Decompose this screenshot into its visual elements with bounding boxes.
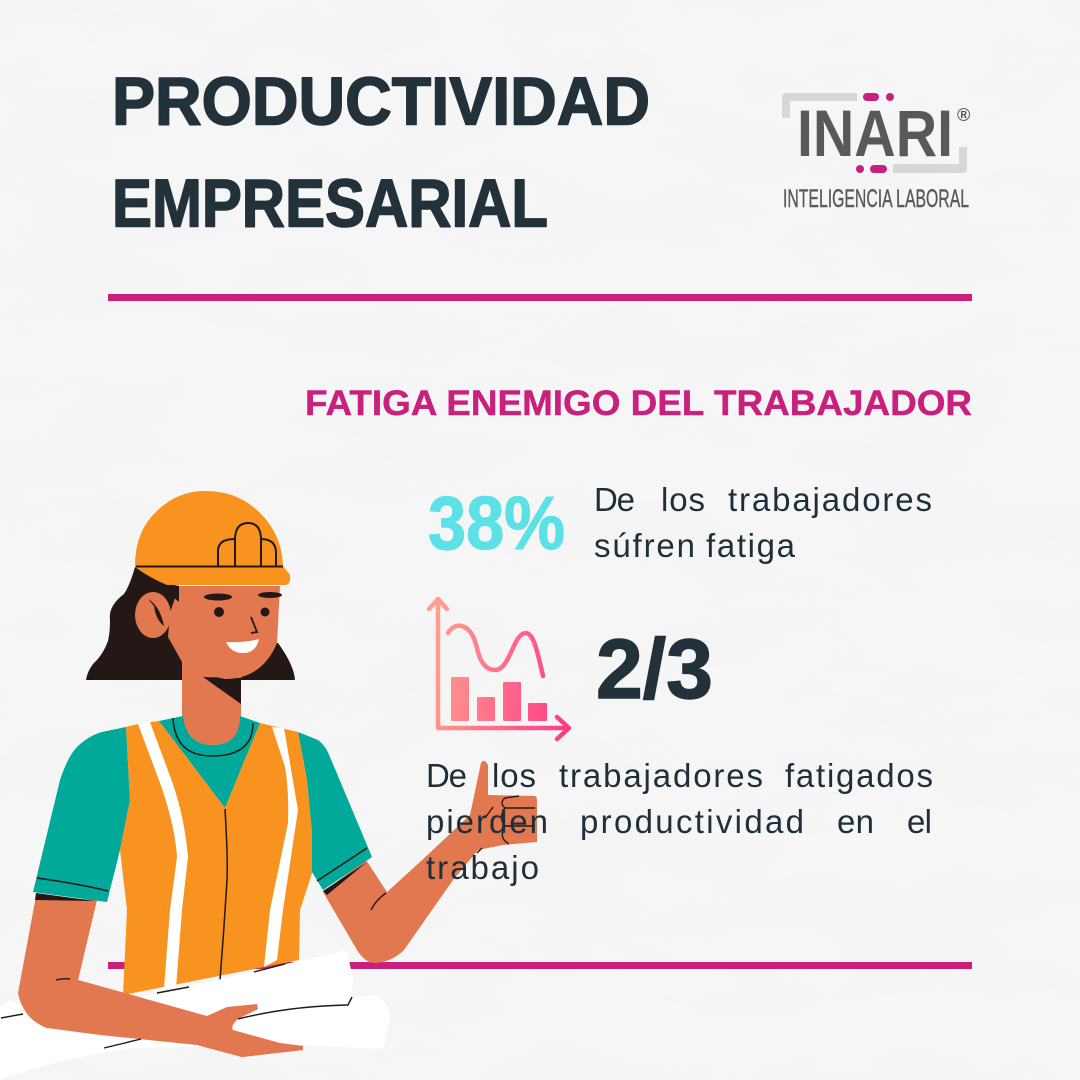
stat: 38%: 38% (428, 481, 565, 565)
text: productivity loss: productividad (580, 803, 804, 840)
neck shadow (203, 677, 241, 704)
subtitle: FATIGA ENEMIGO DEL TRABAJADOR (305, 384, 972, 423)
text: fatigue share: los (661, 481, 705, 518)
neck (182, 640, 241, 745)
illustration: worker with helmet (0, 491, 537, 1080)
vest centre seam (220, 809, 227, 980)
facial features (204, 592, 282, 653)
neckline (173, 718, 253, 756)
face (168, 586, 280, 679)
logo: Inari: ® (957, 105, 970, 125)
logo: Inari: INARI (797, 96, 953, 170)
text: fatigue share: trabajadores (728, 481, 932, 518)
text: productivity loss: en (837, 803, 874, 840)
text: productivity loss: pierden (426, 803, 548, 840)
title: PRODUCTIVIDAD (112, 64, 650, 140)
left arm (18, 896, 303, 1057)
text: productivity loss (426, 757, 933, 886)
vest (120, 721, 312, 995)
right arm with thumb up (323, 761, 537, 963)
text: productivity loss: De (426, 757, 467, 794)
title (112, 64, 650, 242)
text: fatigue share: súfren (594, 527, 695, 564)
right sleeve (298, 732, 372, 890)
rolled plans (0, 950, 390, 1080)
body detail lines (1, 796, 535, 1048)
text: fatigue share: fatiga (706, 527, 796, 564)
text: productivity loss: fatigados (785, 757, 933, 794)
helmet (135, 491, 290, 585)
text: productivity loss: el (907, 803, 932, 840)
title: EMPRESARIAL (112, 166, 548, 242)
text: fatigue share (594, 481, 932, 564)
vest stripes (138, 722, 298, 988)
logo: Inari (782, 93, 970, 213)
left sleeve (33, 727, 130, 902)
text: fatigue share: De (594, 481, 635, 518)
text: productivity loss: trabajo (426, 849, 539, 886)
ear (135, 592, 171, 638)
forearm over plans (18, 950, 303, 1057)
text: productivity loss: trabajadores (559, 757, 763, 794)
text: productivity loss: los (492, 757, 536, 794)
top divider (108, 294, 972, 301)
icon: chart (429, 599, 569, 739)
hair fringe (160, 583, 179, 602)
bottom divider (108, 962, 972, 969)
shirt (159, 716, 260, 808)
logo: Inari: INTELIGENCIA LABORAL (783, 185, 969, 213)
hair (86, 567, 295, 680)
stat: 2/3: 2/3 (596, 622, 713, 716)
